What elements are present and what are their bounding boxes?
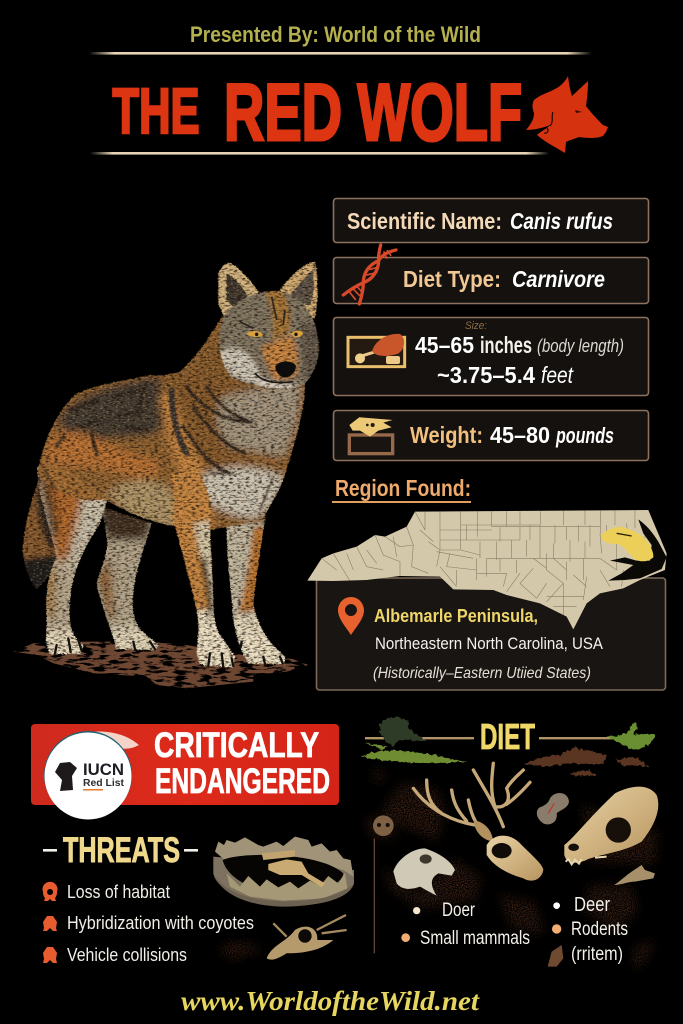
map: north carolina — [307, 510, 667, 629]
diet list: Rodents — [571, 919, 628, 940]
threats list: Vehicle collisions — [67, 945, 187, 965]
iucn red list logo: Red List — [83, 777, 124, 789]
panel: scientific name: Scientific Name: — [347, 208, 502, 234]
illustration: red wolf — [13, 262, 323, 688]
panel: region text: Northeastern North Carolina, USA — [375, 634, 604, 653]
banner: critically endangered — [31, 724, 339, 820]
far hind leg — [96, 507, 158, 650]
panel: region text — [316, 578, 666, 690]
panel: diet type: Diet Type: — [403, 266, 501, 292]
illustration: bear trap — [213, 837, 354, 907]
panel: size: Size: — [465, 320, 487, 332]
panel: diet type — [334, 245, 648, 304]
body and neck — [30, 313, 317, 533]
panel: weight: pounds — [555, 423, 614, 448]
icon: red wolf head — [526, 76, 608, 153]
panel: size — [334, 318, 648, 396]
title: THE — [112, 75, 200, 147]
subtitle: presented by: Presented By: World of the Wild — [190, 22, 481, 47]
banner: critically endangered: ENDANGERED — [155, 762, 330, 801]
panel: weight: 45–80 — [490, 422, 550, 448]
footer: website: www.WorldoftheWild.net — [181, 986, 481, 1016]
banner: critically endangered: CRITICALLY — [154, 726, 319, 765]
wolf face details — [240, 297, 303, 383]
panel: size: inches — [480, 332, 532, 358]
soil speckle — [365, 768, 658, 967]
heading: region found: Region Found: — [335, 475, 471, 501]
icon: location pin — [338, 597, 364, 635]
small bone — [537, 793, 569, 824]
bear skull — [564, 787, 658, 864]
diet list: Doer — [442, 900, 476, 921]
rodent skull — [393, 848, 455, 896]
wolf head — [213, 262, 323, 393]
panel: scientific name — [334, 198, 648, 242]
panel: size: feet — [541, 362, 574, 388]
diet bullets — [401, 902, 563, 967]
heading: diet: DIET — [480, 716, 535, 757]
diet list: Small mammals — [420, 928, 530, 949]
icon: yellow wolf head on map — [601, 519, 667, 581]
icon: threat badge 1 — [43, 882, 57, 901]
round small skull — [373, 815, 394, 953]
iucn red list logo: IUCN — [83, 761, 124, 779]
heading: threats: THREATS — [63, 831, 180, 870]
icon: dna helix — [343, 245, 396, 304]
icon: threat badge 3 — [43, 947, 57, 963]
panel: weight: Weight: — [410, 422, 483, 448]
plants right — [607, 723, 655, 749]
far foreleg — [226, 514, 285, 665]
threats list: Loss of habitat — [67, 882, 170, 902]
near hind leg — [36, 466, 107, 654]
deer skull — [413, 763, 543, 881]
diet list: (rritem) — [571, 944, 623, 965]
plants left — [362, 717, 467, 763]
icon: drumstick — [348, 334, 405, 367]
claw details — [55, 638, 283, 667]
hand bones — [614, 865, 655, 885]
iucn red list logo — [44, 731, 139, 820]
illustration: animal skull — [218, 915, 347, 960]
panel: region text: Albemarle Peninsula, — [374, 605, 538, 626]
icon: skull on crate — [349, 417, 393, 454]
panel: region text: (Historically–Eastern Utiied States) — [373, 665, 591, 682]
soil clumps — [523, 748, 648, 776]
diet list — [420, 894, 628, 965]
illustration: diet scene — [362, 717, 658, 967]
panel: scientific name: Canis rufus — [510, 208, 613, 234]
threats list — [43, 882, 254, 965]
icon: threat badge 2 — [43, 916, 57, 931]
ground soil — [13, 642, 308, 688]
title: RED WOLF — [224, 68, 522, 158]
title — [89, 52, 592, 158]
panel: diet type: Carnivore — [512, 266, 605, 292]
diet list: Deer — [574, 894, 610, 916]
panel: size: ~3.75–5.4 — [437, 362, 535, 388]
panel: weight — [334, 410, 648, 460]
near foreleg — [171, 473, 236, 664]
threats list: Hybridization with coyotes — [67, 913, 254, 933]
tail — [22, 482, 57, 589]
paws — [47, 635, 83, 654]
panel: size: 45–65 — [415, 332, 474, 358]
panel: size: (body length) — [537, 336, 624, 356]
